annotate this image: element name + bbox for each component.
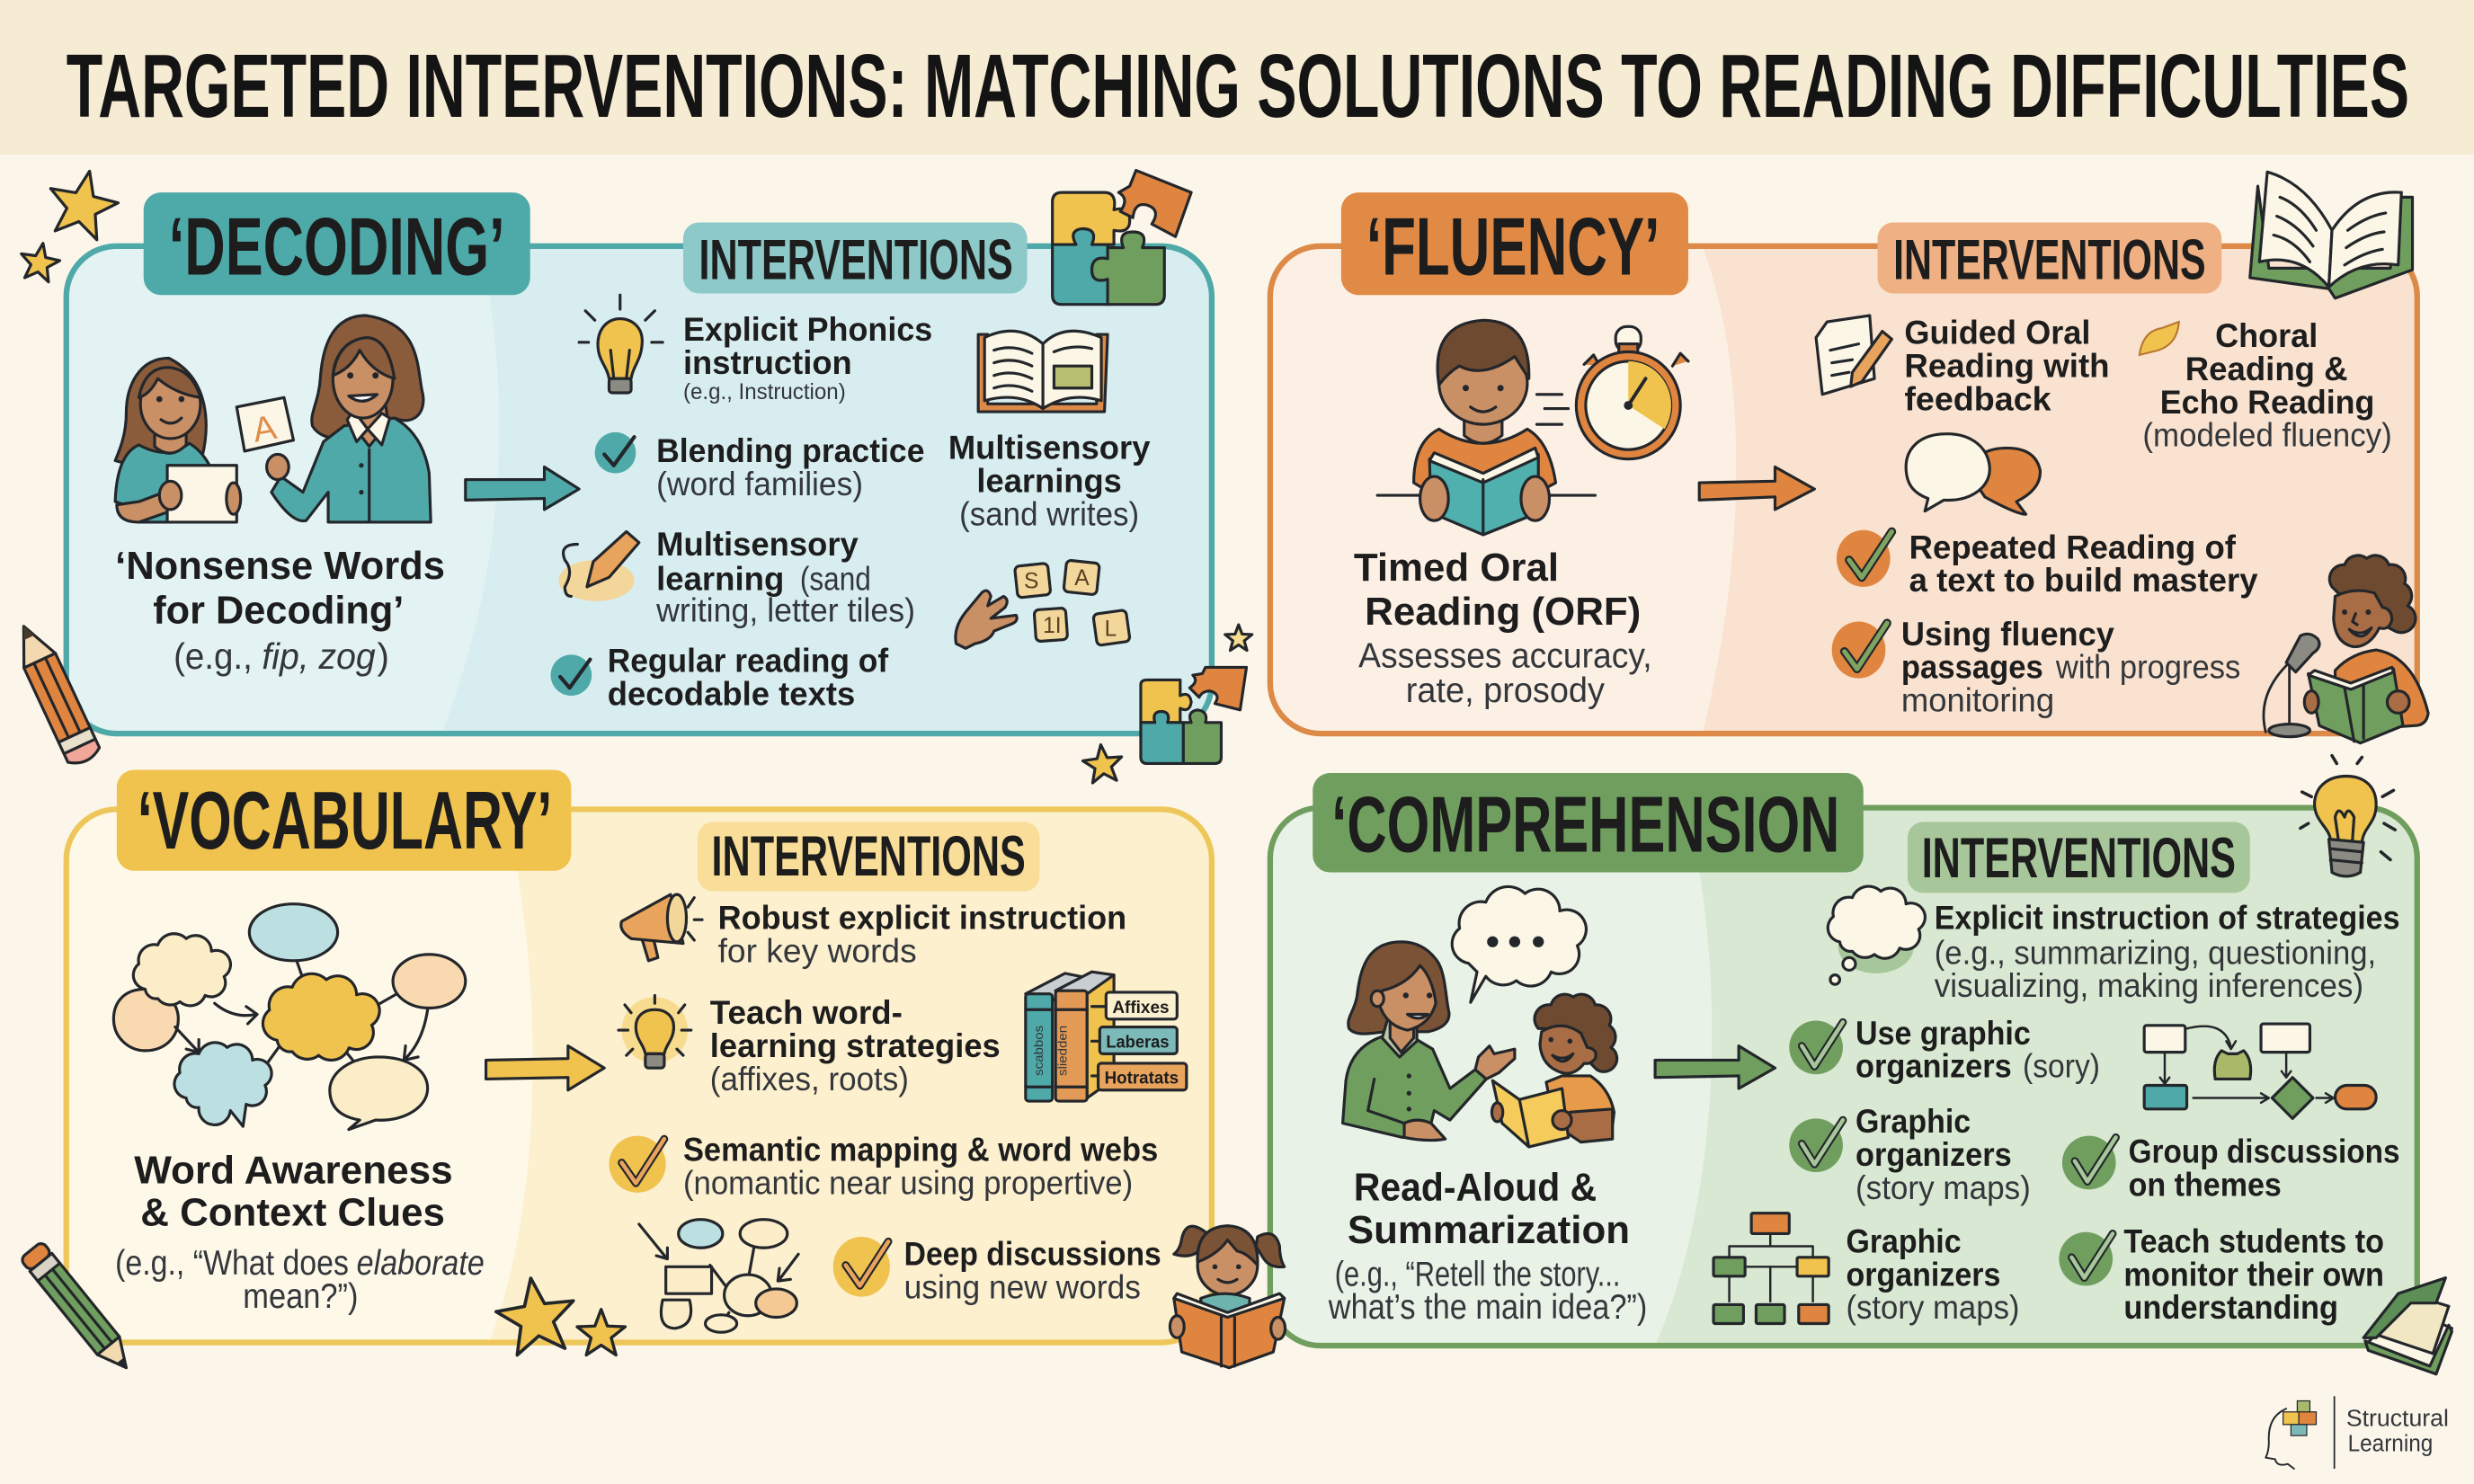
text: multisensory learning: writing, letter tiles) <box>655 591 915 628</box>
text: word learning strategies: Teach word- <box>710 994 903 1031</box>
icon: hand and letter tiles: S <box>1024 570 1038 594</box>
icon: labelled books: Hotratats <box>1105 1070 1179 1089</box>
text: robust explicit instruction: for key words <box>718 933 917 970</box>
chart: tree organizer <box>1713 1213 1829 1324</box>
icon: semantic map <box>639 1220 798 1332</box>
text: timed oral reading: Timed Oral <box>1354 546 1559 590</box>
icon: closed book bottom right <box>2363 1278 2452 1374</box>
icon: star large top left <box>42 164 123 243</box>
illustration: teacher with letter card: A <box>250 408 280 450</box>
icon: jigsaw puzzle bottom <box>1141 667 1247 763</box>
icon: check <box>551 654 592 696</box>
text: word awareness: Word Awareness <box>134 1148 453 1192</box>
text: read-aloud and summarization: (e.g., “Retell the story... <box>1335 1255 1620 1293</box>
text: nonsense words assessment <box>115 544 445 677</box>
title banner <box>0 0 2474 155</box>
text: blending practice: Blending practice <box>656 432 924 469</box>
text: multisensory learning: learning <box>656 560 784 597</box>
text: graphic organizers two <box>1846 1223 2020 1326</box>
icon: star small top left <box>17 240 62 283</box>
icon: hand and letter tiles <box>956 560 1130 648</box>
icon: girl reading <box>1170 1226 1286 1368</box>
icon: document and pen <box>1816 315 1891 395</box>
heading: comprehension interventions: INTERVENTIONS <box>1922 827 2236 890</box>
text: choral and echo reading: Choral <box>2215 317 2318 354</box>
text: guided oral reading: feedback <box>1904 380 2051 417</box>
text: fluency passages: with progress <box>2055 649 2240 686</box>
text: regular reading: decodable texts <box>608 676 855 713</box>
text: teach students to monitor: understanding <box>2123 1289 2338 1326</box>
text: graphic organizers one: Graphic <box>1856 1103 1971 1140</box>
text: multisensory learning: Multisensory <box>656 526 859 563</box>
text: guided oral reading: Reading with <box>1904 347 2110 384</box>
heading: fluency interventions <box>1878 222 2221 293</box>
text: explicit instruction of strategies <box>1935 900 2399 1004</box>
text: graphic organizers two: (story maps) <box>1846 1289 2020 1326</box>
heading: decoding interventions <box>683 222 1028 293</box>
text: graphic organizers one <box>1856 1103 2031 1206</box>
icon: hand and letter tiles: L <box>1105 617 1117 641</box>
text: robust explicit instruction: Robust explicit instruction <box>718 900 1126 937</box>
text: nonsense words assessment: ) <box>377 635 389 677</box>
icon: star below puzzle <box>1081 742 1124 784</box>
text: multisensory learnings <box>948 430 1151 532</box>
arrow: vocabulary <box>486 1046 604 1090</box>
text: blending practice <box>656 432 924 502</box>
illustration: boy reading <box>1377 320 1595 535</box>
icon: megaphone <box>621 894 702 961</box>
text: timed oral reading <box>1354 546 1652 710</box>
icon: hand and letter tiles: 1I <box>1043 614 1062 638</box>
text: timed oral reading: rate, prosody <box>1406 671 1606 710</box>
text: robust explicit instruction <box>718 900 1126 970</box>
arrow: comprehension <box>1655 1046 1775 1089</box>
text: semantic mapping: (nomantic near using propertive) <box>683 1165 1133 1202</box>
illustration: teacher <box>1343 942 1515 1141</box>
icon: check <box>833 1237 890 1297</box>
icon: thought cloud <box>1828 886 1925 984</box>
logo: structural learning <box>2265 1396 2449 1469</box>
text: explicit phonics: (e.g., Instruction) <box>683 380 846 404</box>
text: word awareness: elaborate <box>357 1244 485 1283</box>
icon: feather <box>2140 322 2179 355</box>
text: word learning strategies: learning strategies <box>710 1027 1001 1064</box>
heading: decoding interventions: INTERVENTIONS <box>699 229 1013 292</box>
text: word awareness: mean?”) <box>243 1277 358 1316</box>
text: choral and echo reading: (modeled fluency) <box>2142 417 2392 454</box>
text: multisensory learning <box>655 526 915 629</box>
panel: fluency <box>1270 192 2417 733</box>
heading: comprehension: ‘COMPREHENSION <box>1331 781 1839 869</box>
icon: star large <box>492 1273 580 1357</box>
illustration: child with book <box>1491 994 1617 1147</box>
text: nonsense words assessment: for Decoding’ <box>153 588 404 632</box>
text: choral and echo reading <box>2142 317 2392 454</box>
icon: check <box>2062 1136 2116 1189</box>
icon: labelled books: Affixes <box>1112 999 1170 1017</box>
text: read-aloud and summarization: Read-Aloud & <box>1354 1166 1597 1210</box>
text: teach students to monitor: monitor their own <box>2123 1256 2384 1293</box>
illustration: student with paper <box>115 358 241 522</box>
icon: star tiny right <box>1225 625 1252 651</box>
icon: labelled books: scabbos <box>1031 1026 1046 1076</box>
heading: vocabulary interventions: INTERVENTIONS <box>712 825 1026 888</box>
text: timed oral reading: Assesses accuracy, <box>1358 636 1652 675</box>
illustration: speech bubble with dots <box>1452 886 1586 1002</box>
text: graphic organizers one: organizers <box>1856 1136 2012 1173</box>
logo: structural learning: Learning <box>2348 1430 2433 1457</box>
icon: check <box>609 1136 666 1193</box>
text: explicit instruction of strategies: (e.g., summarizing, questioning, <box>1935 934 2376 971</box>
icon: check <box>1789 1118 1843 1172</box>
icon: lightbulb top right <box>2300 756 2395 876</box>
icon: pencil writing in sand <box>558 531 639 601</box>
text: explicit phonics <box>683 311 932 404</box>
text: group discussions <box>2129 1133 2399 1203</box>
text: explicit phonics: instruction <box>683 344 852 381</box>
text: repeated reading: a text to build mastery <box>1909 562 2258 599</box>
icon: lightbulb with halo <box>618 995 691 1068</box>
icon: check <box>595 432 636 474</box>
text: read-aloud and summarization: what’s the main idea?”) <box>1328 1288 1647 1327</box>
heading: fluency interventions: INTERVENTIONS <box>1893 229 2206 292</box>
heading: vocabulary <box>117 769 571 871</box>
heading: decoding: ‘DECODING’ <box>169 200 505 292</box>
illustration: boy with microphone <box>2264 555 2428 743</box>
text: graphic organizers two: organizers <box>1846 1256 2000 1293</box>
icon: hand and letter tiles: A <box>1074 566 1090 591</box>
text: read-aloud and summarization <box>1328 1166 1647 1327</box>
text: timed oral reading: Reading (ORF) <box>1365 590 1641 634</box>
panel: decoding <box>67 192 1212 733</box>
text: use graphic organizers: (sory) <box>2023 1048 2100 1085</box>
text: regular reading <box>608 643 889 713</box>
icon: pencil left decoding <box>8 619 102 768</box>
heading: comprehension <box>1313 773 1864 873</box>
icon: check <box>1789 1021 1843 1074</box>
icon: lightbulb <box>579 295 663 393</box>
heading: vocabulary interventions <box>698 822 1040 892</box>
text: use graphic organizers <box>1856 1015 2100 1085</box>
logo: structural learning: Structural <box>2346 1405 2449 1432</box>
text: word awareness: & Context Clues <box>140 1191 445 1235</box>
text: semantic mapping: Semantic mapping & word webs <box>683 1132 1158 1169</box>
text: word awareness: (e.g., “What does <box>115 1244 349 1283</box>
text: use graphic organizers: Use graphic <box>1856 1015 2031 1052</box>
heading: fluency <box>1341 192 1688 295</box>
text: multisensory learnings: learnings <box>976 463 1122 500</box>
heading: vocabulary: ‘VOCABULARY’ <box>138 775 552 866</box>
chart: flow diagram <box>2144 1024 2376 1118</box>
text: deep discussions <box>904 1236 1161 1305</box>
illustration: teacher with letter card <box>236 315 431 522</box>
text: teach students to monitor: Teach students to <box>2123 1223 2384 1260</box>
text: multisensory learnings: Multisensory <box>948 430 1151 467</box>
icon: labelled books: sliedden <box>1055 1026 1069 1076</box>
text: fluency passages <box>1901 616 2240 719</box>
icon: check <box>1832 621 1887 679</box>
text: use graphic organizers: organizers <box>1856 1048 2012 1085</box>
text: fluency passages: Using fluency <box>1901 616 2114 653</box>
text: deep discussions: Deep discussions <box>904 1236 1161 1273</box>
icon: open book with picture <box>978 331 1108 412</box>
icon: check <box>2059 1232 2113 1285</box>
text: choral and echo reading: Reading & <box>2185 351 2348 387</box>
text: group discussions: on themes <box>2129 1166 2282 1203</box>
text: read-aloud and summarization: Summarization <box>1348 1208 1630 1252</box>
text: nonsense words assessment: fip, zog <box>262 635 376 677</box>
heading: comprehension interventions <box>1908 822 2250 893</box>
text: explicit instruction of strategies: Explicit instruction of strategies <box>1935 900 2399 937</box>
icon: labelled books <box>1026 972 1187 1101</box>
text: explicit instruction of strategies: visualizing, making inferences) <box>1935 967 2363 1004</box>
text: multisensory learnings: (sand writes) <box>959 495 1139 532</box>
text: graphic organizers one: (story maps) <box>1856 1169 2031 1206</box>
text: multisensory learning: (sand <box>800 560 871 597</box>
text: word awareness <box>115 1148 485 1316</box>
text: graphic organizers two: Graphic <box>1846 1223 1962 1260</box>
arrow: decoding <box>466 467 579 510</box>
text: word learning strategies: (affixes, roots) <box>710 1061 909 1097</box>
text: explicit phonics: Explicit Phonics <box>683 311 932 348</box>
icon: check <box>1837 530 1891 587</box>
text: repeated reading: Repeated Reading of <box>1909 529 2237 565</box>
text: fluency passages: monitoring <box>1901 682 2054 719</box>
heading: fluency: ‘FLUENCY’ <box>1366 200 1660 292</box>
icon: open book top right <box>2250 172 2413 298</box>
text: word learning strategies <box>710 994 1001 1097</box>
text: repeated reading <box>1909 529 2258 599</box>
icon: star small <box>577 1310 625 1355</box>
arrow: fluency <box>1699 467 1814 510</box>
icon: jigsaw puzzle top <box>1053 171 1191 305</box>
text: guided oral reading: Guided Oral <box>1904 315 2090 351</box>
text: regular reading: Regular reading of <box>608 643 889 680</box>
illustration: word web <box>113 904 466 1130</box>
icon: labelled books: Laberas <box>1106 1033 1170 1052</box>
heading: decoding <box>144 192 530 295</box>
icon: pencil left vocabulary <box>20 1241 138 1377</box>
icon: stopwatch <box>1536 326 1688 459</box>
panel: vocabulary <box>67 769 1212 1343</box>
text: blending practice: (word families) <box>656 466 863 502</box>
text: nonsense words assessment: ‘Nonsense Words <box>115 544 445 588</box>
text: semantic mapping <box>683 1132 1158 1202</box>
text: nonsense words assessment: (e.g., <box>174 635 253 677</box>
text: deep discussions: using new words <box>904 1268 1141 1305</box>
text: fluency passages: passages <box>1901 649 2043 686</box>
text: group discussions: Group discussions <box>2129 1133 2399 1169</box>
text: guided oral reading <box>1904 315 2110 417</box>
panel: comprehension <box>1270 773 2417 1346</box>
icon: speech bubbles <box>1906 434 2040 514</box>
text: choral and echo reading: Echo Reading <box>2160 384 2374 421</box>
text: teach students to monitor <box>2123 1223 2384 1326</box>
